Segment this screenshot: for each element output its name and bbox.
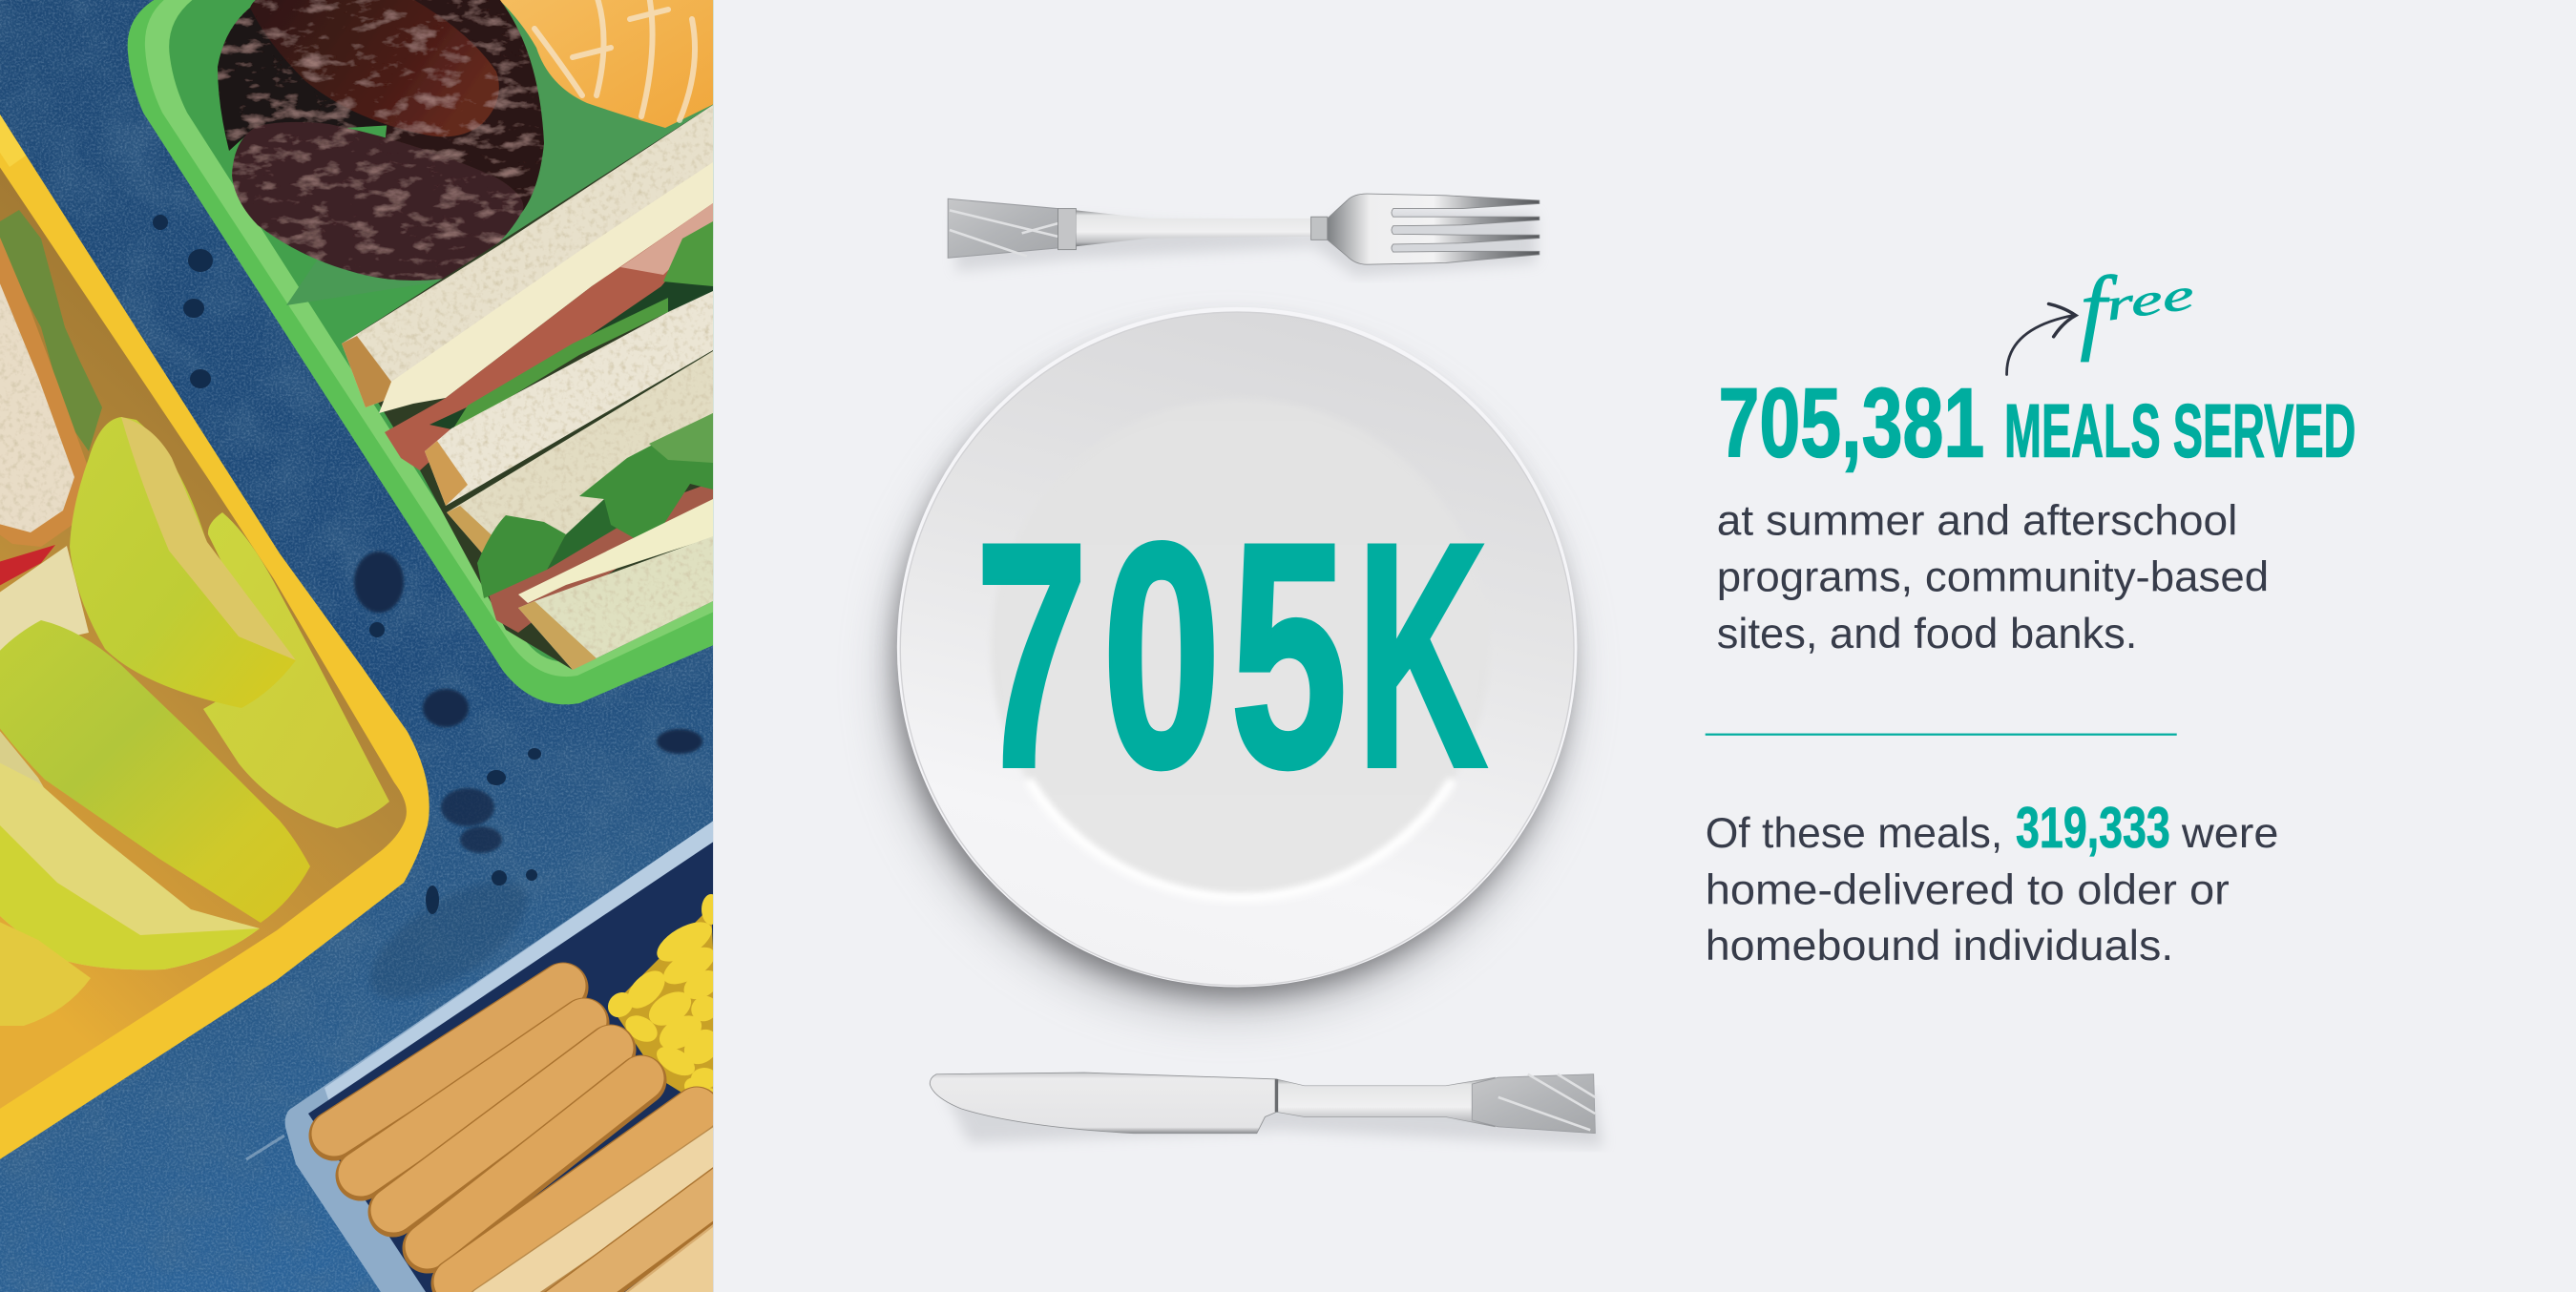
upper date (250, 0, 499, 136)
text block: where meals were served: sites, and food banks. (1717, 610, 2137, 657)
text block: home-delivered meals (1706, 795, 2278, 969)
bread crumb (0, 272, 74, 532)
bread slice and lettuce (0, 210, 102, 654)
back date right (382, 0, 544, 215)
fork collar (1058, 209, 1076, 250)
tray interior (308, 837, 721, 1292)
sandwiches (342, 105, 713, 670)
knife (930, 1073, 1603, 1146)
tray rim (285, 816, 721, 1292)
yellow tray (0, 107, 429, 1162)
sandwich slice 4 cheese (518, 499, 713, 603)
big figure on plate: 5 (1230, 477, 1347, 833)
big figure on plate (975, 477, 1487, 833)
bread crust (0, 226, 93, 547)
fork handle end (948, 198, 1058, 258)
fork (948, 194, 1539, 276)
plate (888, 307, 1577, 1013)
sandwich shadow base (342, 105, 713, 670)
apple slices (0, 417, 389, 1026)
fork stem (1076, 210, 1311, 246)
knife shadow (945, 1091, 1603, 1146)
tomato (0, 545, 55, 588)
big figure on plate: 0 (1102, 477, 1221, 833)
corn (603, 894, 725, 1116)
headline: meals served (1718, 368, 2356, 478)
text block: home-delivered meals: 319,333 (2016, 795, 2170, 860)
script word free: ree (2103, 270, 2197, 331)
panel: food photo with lunch trays (0, 0, 773, 1292)
plate inner well (991, 399, 1490, 899)
sandwich slice 3 lettuce right (579, 413, 713, 547)
apple slice: cream behind (0, 725, 57, 811)
apple slice: lower (0, 761, 260, 969)
sandwich slice 3 bread (447, 351, 713, 556)
text block: where meals were served (1717, 496, 2269, 657)
text block: home-delivered meals: were (2181, 809, 2278, 857)
sandwich slice 1 ham (385, 203, 713, 470)
headline: free annotation (2007, 257, 2197, 374)
sandwich slice 4 bread (518, 536, 713, 670)
fork shadow (956, 209, 1536, 276)
script word free: f (2080, 257, 2118, 363)
apple slice: back right (203, 512, 389, 828)
dates (218, 0, 544, 281)
crackers (334, 986, 773, 1292)
plate halo (897, 307, 1577, 988)
sandwich slice 3 lettuce left (477, 515, 566, 598)
apple slice lower skin (0, 821, 260, 969)
knife handle end (1472, 1074, 1595, 1134)
text block: where meals were served: at summer and afterschool (1717, 496, 2237, 544)
blue tray with crackers and corn (285, 816, 773, 1292)
sandwich slice 3 ham (489, 482, 713, 633)
sandwich slice 1 crust (342, 336, 391, 407)
apple slice: middle (0, 620, 310, 923)
white filling (0, 546, 89, 654)
text block: home-delivered meals: home-delivered to older or (1706, 866, 2230, 914)
sandwich slice 1 lettuce (429, 222, 713, 429)
apple slice: upper (70, 417, 296, 708)
big figure on plate: K (1357, 477, 1487, 833)
text block: home-delivered meals: Of these meals, (1706, 809, 2002, 857)
plate contact shadow (897, 328, 1567, 995)
big figure on plate: 7 (975, 477, 1088, 833)
arrow (2007, 303, 2076, 374)
lower date (232, 122, 523, 281)
orange segments (494, 0, 716, 128)
fork head with tines (1328, 194, 1539, 264)
apple cut facet (121, 417, 296, 660)
fork neck (1311, 217, 1328, 240)
text block: where meals were served: programs, community-based (1717, 553, 2269, 601)
green tray (128, 0, 716, 704)
sandwich slice 1 bread (342, 105, 713, 407)
apple slice: bottom (0, 920, 91, 1026)
sandwich slice 1 cheese (379, 162, 713, 413)
text block: home-delivered meals: homebound individuals. (1706, 922, 2173, 969)
knife handle (1276, 1077, 1495, 1127)
back date left (218, 8, 387, 151)
knife blade (930, 1073, 1276, 1134)
script word free (2080, 257, 2197, 363)
lettuce (0, 210, 102, 451)
plate rim (900, 312, 1574, 986)
blue table surface (0, 0, 716, 1292)
headline: meals served: 705,381 (1718, 368, 1984, 478)
lettuce shade (547, 499, 630, 570)
plate soft shadow (888, 340, 1571, 1013)
sandwich slice 2 bread (425, 291, 713, 506)
